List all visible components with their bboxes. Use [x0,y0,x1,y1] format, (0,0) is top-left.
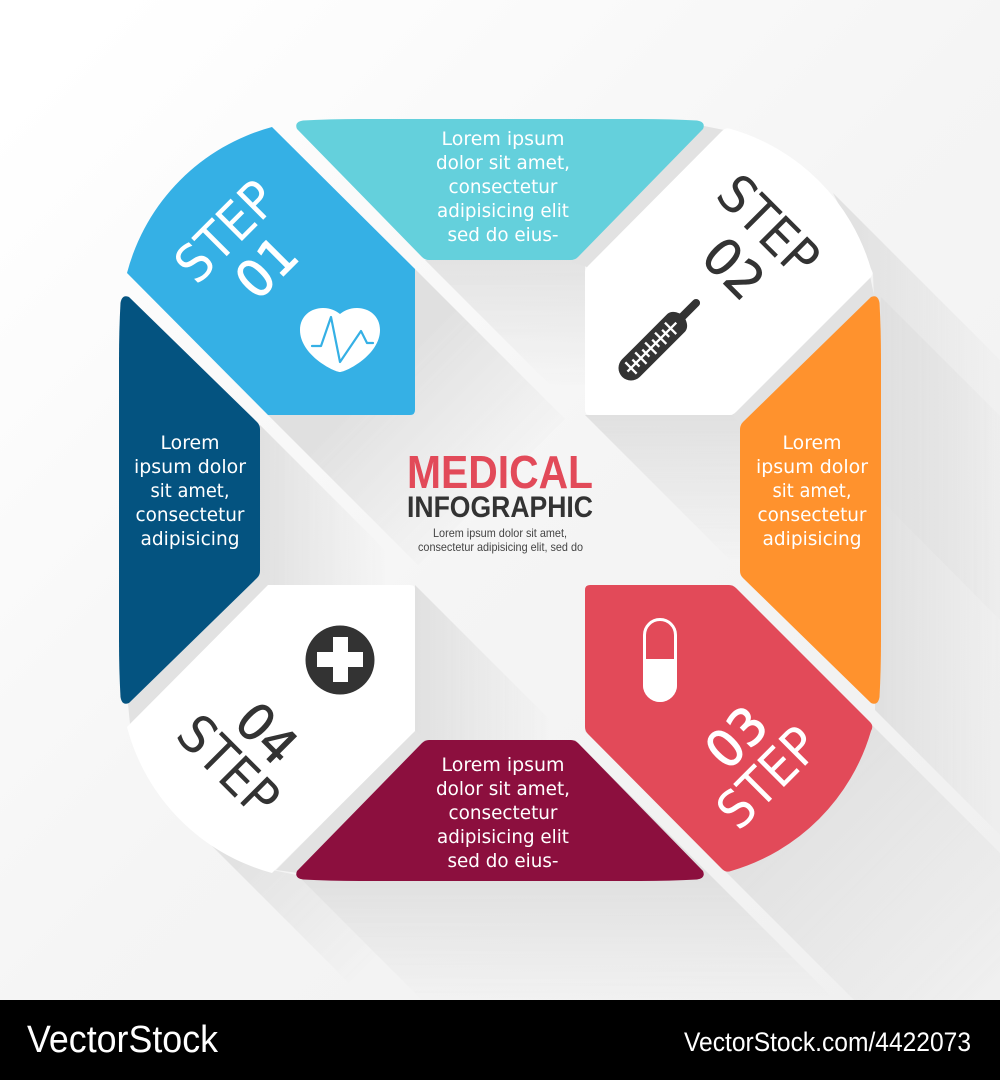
right text block: adipisicing [762,528,862,550]
subtitle: Lorem ipsum dolor sit amet, [433,526,567,540]
step 01 number: 01 [225,226,310,311]
icon: thermometer [613,291,708,386]
bottom text block: Lorem ipsum [442,754,564,776]
step 04 number: 04 [223,692,308,777]
panel: top text [296,119,704,260]
top text block: adipisicing elit [437,200,569,222]
icon: pill [643,620,677,702]
footer bar [0,1000,1000,1080]
step 02 label: STEP [705,163,831,289]
panel: left text [119,296,260,704]
footer image id: VectorStock.com/4422073 [684,1027,971,1057]
subtitle: consectetur adipisicing elit, sed do [418,540,583,554]
right text block: Lorem [782,432,842,454]
step 03 number: 03 [695,696,780,781]
right text block: sit amet, [772,480,852,502]
top text block [436,128,570,246]
bottom text block [436,754,570,872]
top text block: consectetur [448,176,558,198]
panel: step 04 [127,585,415,873]
panel: step 01 [127,127,415,415]
title: MEDICAL [407,446,593,498]
icon: medical cross [306,626,374,694]
bottom text block: adipisicing elit [437,826,569,848]
left text block [134,432,246,550]
footer brand: VectorStock [27,1019,219,1061]
panel: step 02 [585,128,872,415]
left text block: sit amet, [150,480,230,502]
right text block [756,432,868,550]
title [407,446,593,524]
bottom text block: consectetur [448,802,558,824]
step 02 number: 02 [690,227,775,312]
bottom text block: dolor sit amet, [436,778,570,800]
panel: bottom text [296,740,704,881]
left text block: ipsum dolor [134,456,246,478]
title: INFOGRAPHIC [407,491,593,524]
panel: right text [740,296,881,704]
subtitle [418,526,583,554]
step 04 label: STEP [165,703,291,829]
top text block: Lorem ipsum [442,128,564,150]
left text block: Lorem [160,432,220,454]
step 01 label: STEP [163,169,289,295]
panel: step 03 [585,585,872,872]
long shadows [128,126,1000,1000]
right text block: consectetur [758,504,867,526]
icon: heart with pulse [300,308,380,372]
step 03 label: STEP [705,715,831,841]
top text block: sed do eius- [448,224,558,246]
top text block: dolor sit amet, [436,152,570,174]
right text block: ipsum dolor [756,456,868,478]
left text block: consectetur [136,504,245,526]
bottom text block: sed do eius- [448,850,558,872]
left text block: adipisicing [140,528,240,550]
